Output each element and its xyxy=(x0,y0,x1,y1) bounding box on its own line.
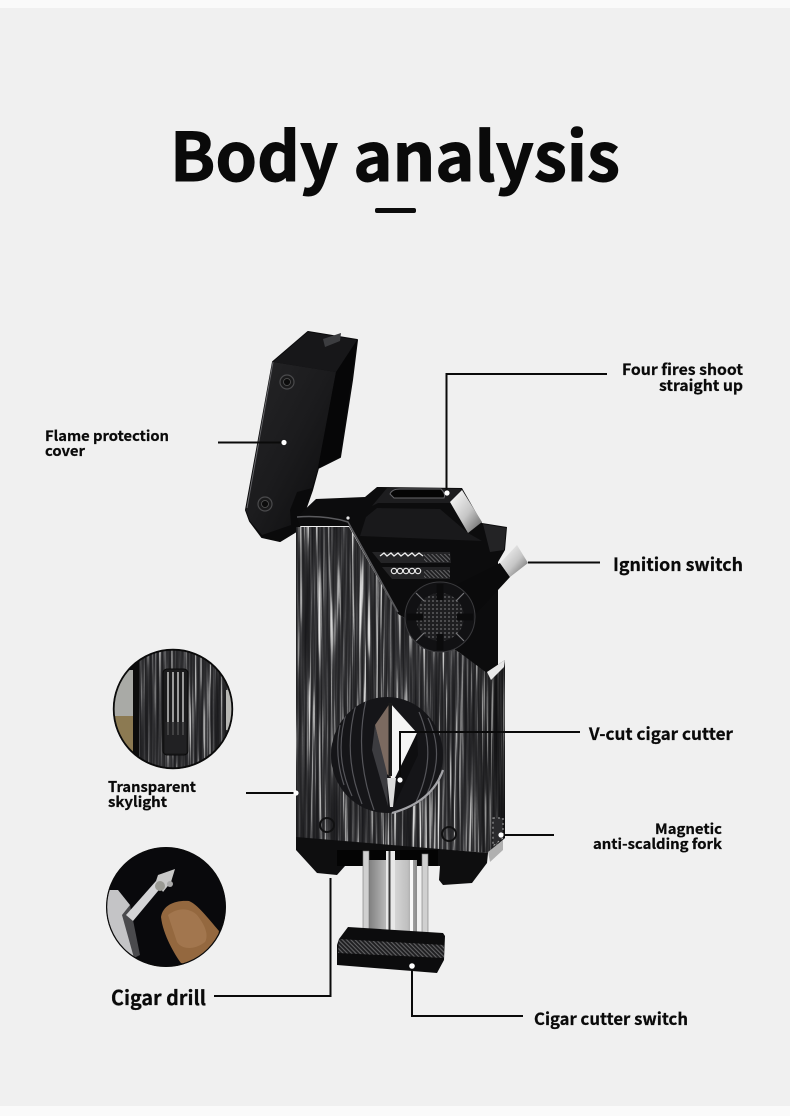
cutter slide rods xyxy=(363,851,428,939)
callout: transparent skylight: skylight xyxy=(108,791,167,812)
ignition dial xyxy=(405,582,475,652)
inset: transparent skylight xyxy=(113,649,234,770)
callout: magnetic anti-scalding fork xyxy=(498,819,723,854)
callout: four fires shoot straight up: Four fires shoot xyxy=(622,358,743,380)
callout: ignition switch: Ignition switch xyxy=(613,551,743,577)
callout: flame protection cover: Flame protection xyxy=(45,426,169,446)
callout: magnetic anti-scalding fork: anti-scalding fork xyxy=(593,834,723,854)
cigar xyxy=(161,901,219,963)
V-blade opening xyxy=(390,703,417,778)
magnetic fork xyxy=(493,818,503,846)
flame outlet xyxy=(390,489,445,498)
callout: cigar cutter switch: Cigar cutter switch xyxy=(534,1006,688,1030)
title underline xyxy=(375,208,416,213)
callout: magnetic anti-scalding fork: Magnetic xyxy=(655,819,722,839)
callout: cigar drill: Cigar drill xyxy=(111,982,206,1011)
callout: V-cut cigar cutter xyxy=(397,720,734,783)
callout: four fires shoot straight up xyxy=(444,358,743,496)
ignition arm xyxy=(452,545,528,617)
silver lighter corner xyxy=(107,890,134,956)
callout: transparent skylight: Transparent xyxy=(108,776,196,797)
callout: four fires shoot straight up: straight up xyxy=(659,374,743,396)
product: lighter xyxy=(246,332,528,973)
lighter base xyxy=(296,818,503,885)
lighter lid xyxy=(246,332,357,541)
vent slots xyxy=(372,552,451,579)
callout: cigar cutter switch xyxy=(409,963,688,1030)
callout: flame protection cover: cover xyxy=(45,441,86,461)
cutter button xyxy=(337,927,445,973)
title: Body analysis xyxy=(170,104,620,201)
lighter body with wood grain xyxy=(290,520,510,855)
drill arm xyxy=(126,881,158,921)
callout: cigar drill xyxy=(111,878,330,1011)
inset: cigar drill xyxy=(106,847,226,967)
cigar cutter hole xyxy=(331,697,443,813)
callout: transparent skylight xyxy=(108,776,299,812)
lighter head xyxy=(297,487,507,680)
callout: V-cut cigar cutter: V-cut cigar cutter xyxy=(588,720,734,745)
callout: flame protection cover xyxy=(45,426,287,461)
